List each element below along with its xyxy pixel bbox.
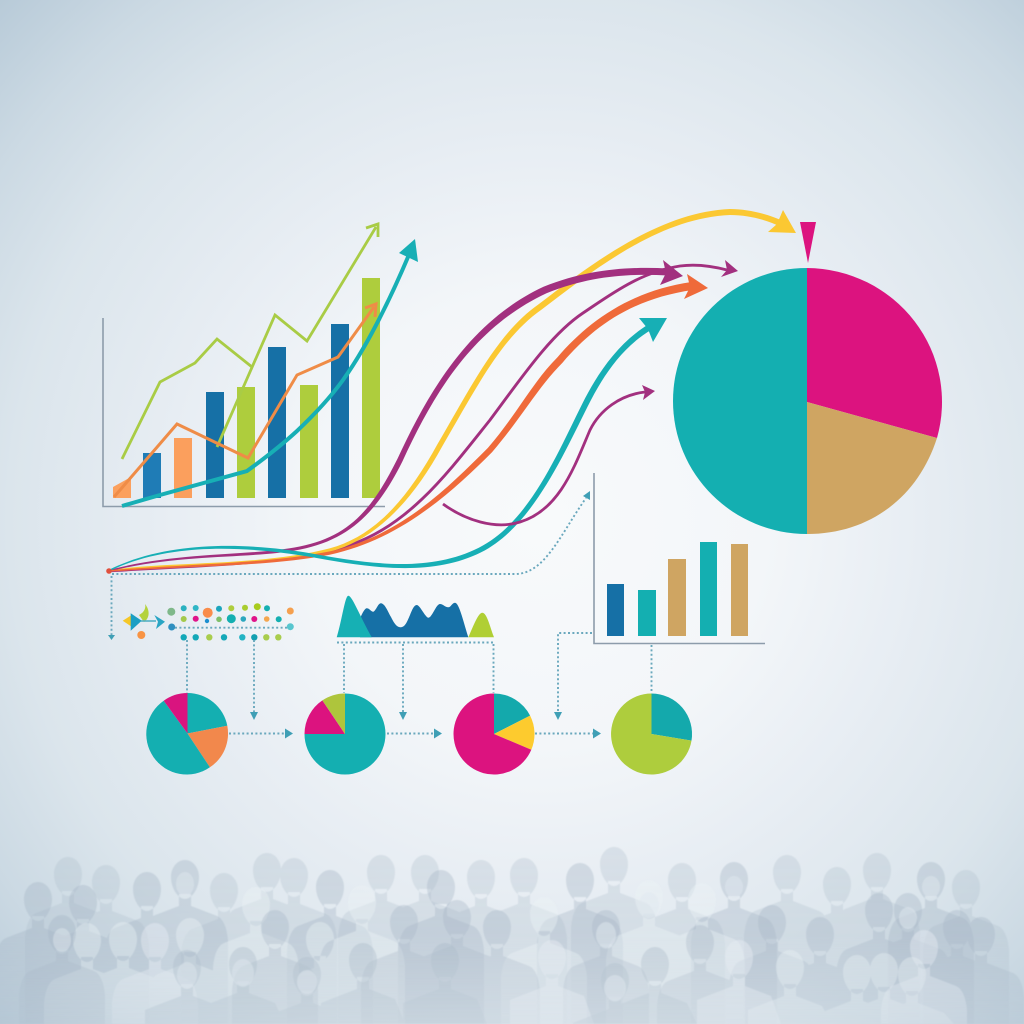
flow: thick purple arrow bbox=[108, 260, 683, 572]
small chart bars bbox=[607, 542, 748, 636]
teal growth curve with arrow bbox=[122, 239, 418, 506]
small pie 4 bbox=[611, 693, 692, 774]
flow: thick orange arrow bbox=[108, 274, 708, 572]
small chart axes bbox=[594, 473, 765, 644]
dotted connector down to dots bbox=[108, 576, 115, 640]
flow: thin purple curve to pie bbox=[108, 260, 738, 571]
small pie 3 bbox=[454, 694, 535, 774]
flow: yellow arrow bbox=[108, 209, 796, 572]
large pie chart bbox=[673, 268, 942, 534]
magenta pointer above pie bbox=[800, 222, 816, 263]
green trend line with arrow bbox=[122, 224, 378, 459]
small pie 1 bbox=[146, 693, 228, 775]
mini area chart bbox=[337, 596, 494, 637]
dotted arrow: pie 2 to pie 3 bbox=[387, 728, 442, 738]
flow: thin purple branch arrow bbox=[443, 385, 655, 525]
scattered data dots bbox=[167, 603, 294, 640]
icon: small arrow cluster bbox=[123, 604, 165, 639]
panel: rising bar and line chart bbox=[103, 224, 418, 506]
dotted connectors from dot row bbox=[187, 640, 258, 720]
chart axes bbox=[103, 318, 385, 506]
dotted arrow: pie 3 to pie 4 bbox=[535, 728, 601, 738]
orange trend line with arrow bbox=[114, 304, 376, 497]
dotted connector from small chart bbox=[554, 633, 652, 720]
small pie 2 bbox=[304, 694, 386, 774]
crowd silhouettes bbox=[0, 847, 1024, 1024]
dotted connectors from area chart bbox=[337, 642, 494, 720]
panel: small bar chart bbox=[594, 473, 765, 644]
dotted connector to small chart bbox=[112, 491, 590, 574]
chart bars bbox=[113, 278, 380, 498]
flow origin marker bbox=[106, 568, 112, 574]
dotted arrow: pie 1 to pie 2 bbox=[229, 728, 293, 738]
flow: thick teal arrow bbox=[108, 318, 667, 572]
